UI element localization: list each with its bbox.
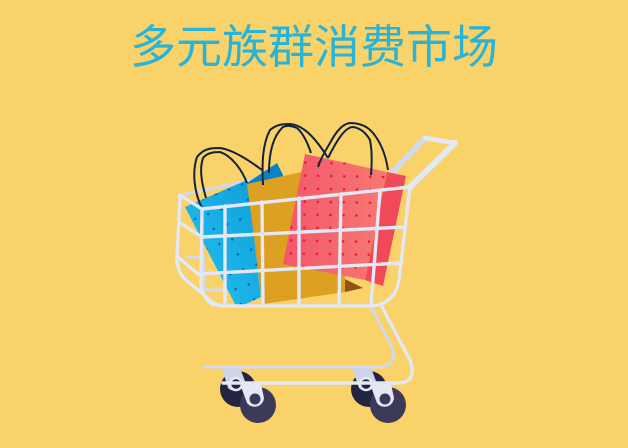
cart back frame (181, 138, 425, 367)
title: 多元族群消费市场 (130, 21, 498, 73)
wheels: right back (351, 368, 387, 407)
cart basket wires (177, 138, 455, 383)
wheels: left front (240, 384, 276, 423)
wheels: left back (220, 368, 256, 407)
wheels: right front (370, 384, 406, 423)
bag: blue (185, 148, 283, 308)
bag: gold (247, 124, 363, 304)
bag: red (283, 123, 406, 286)
